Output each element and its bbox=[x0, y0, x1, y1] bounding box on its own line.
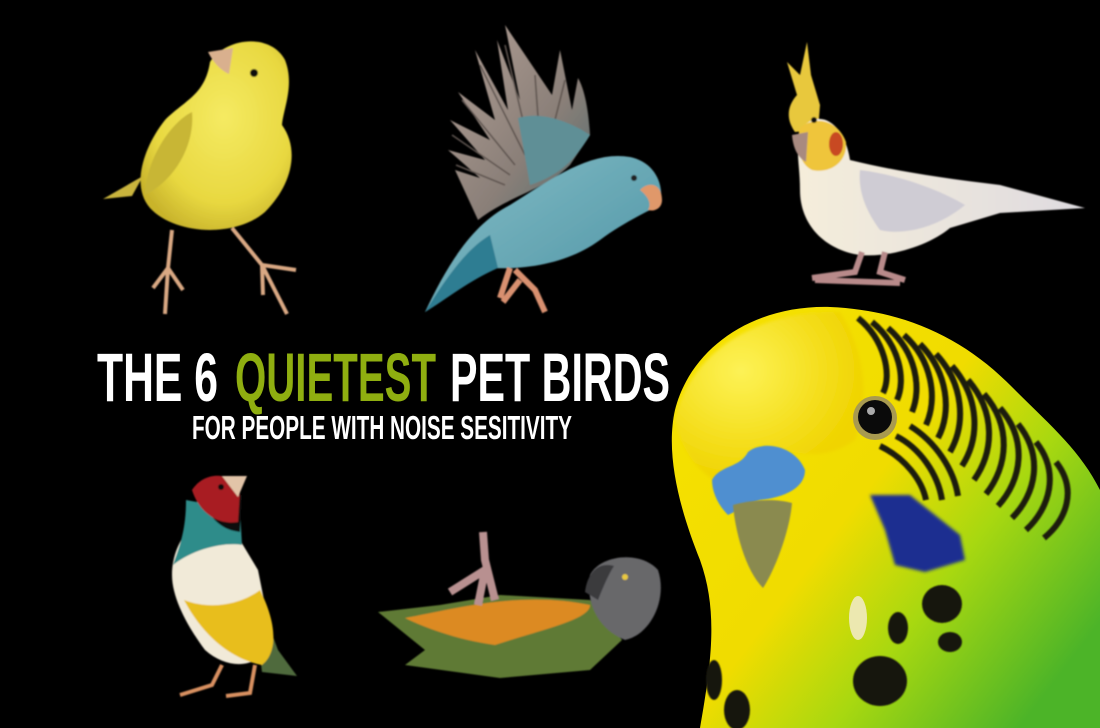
bird: senegal parrot bbox=[378, 532, 661, 678]
wing feather lines bbox=[452, 45, 565, 185]
title bbox=[97, 339, 670, 416]
subtitle: FOR PEOPLE WITH NOISE SESITIVITY bbox=[192, 409, 572, 446]
eye bbox=[853, 396, 897, 440]
title: THE 6 bbox=[97, 339, 218, 416]
title: PET BIRDS bbox=[450, 339, 670, 416]
bird: yellow canary bbox=[103, 41, 296, 314]
cere and beak bbox=[712, 446, 805, 515]
bird: budgerigar close-up bbox=[672, 307, 1100, 728]
throat spots bbox=[706, 585, 962, 728]
title: QUIETEST bbox=[235, 339, 436, 416]
budgie body bbox=[672, 307, 1100, 728]
bird: cockatiel bbox=[787, 42, 1085, 283]
bird: blue parrotlet bbox=[425, 25, 662, 312]
bird: gouldian finch bbox=[172, 476, 297, 696]
pale feather bbox=[849, 596, 867, 640]
head stripes bbox=[858, 318, 1068, 538]
blue cheek patch bbox=[870, 495, 965, 572]
